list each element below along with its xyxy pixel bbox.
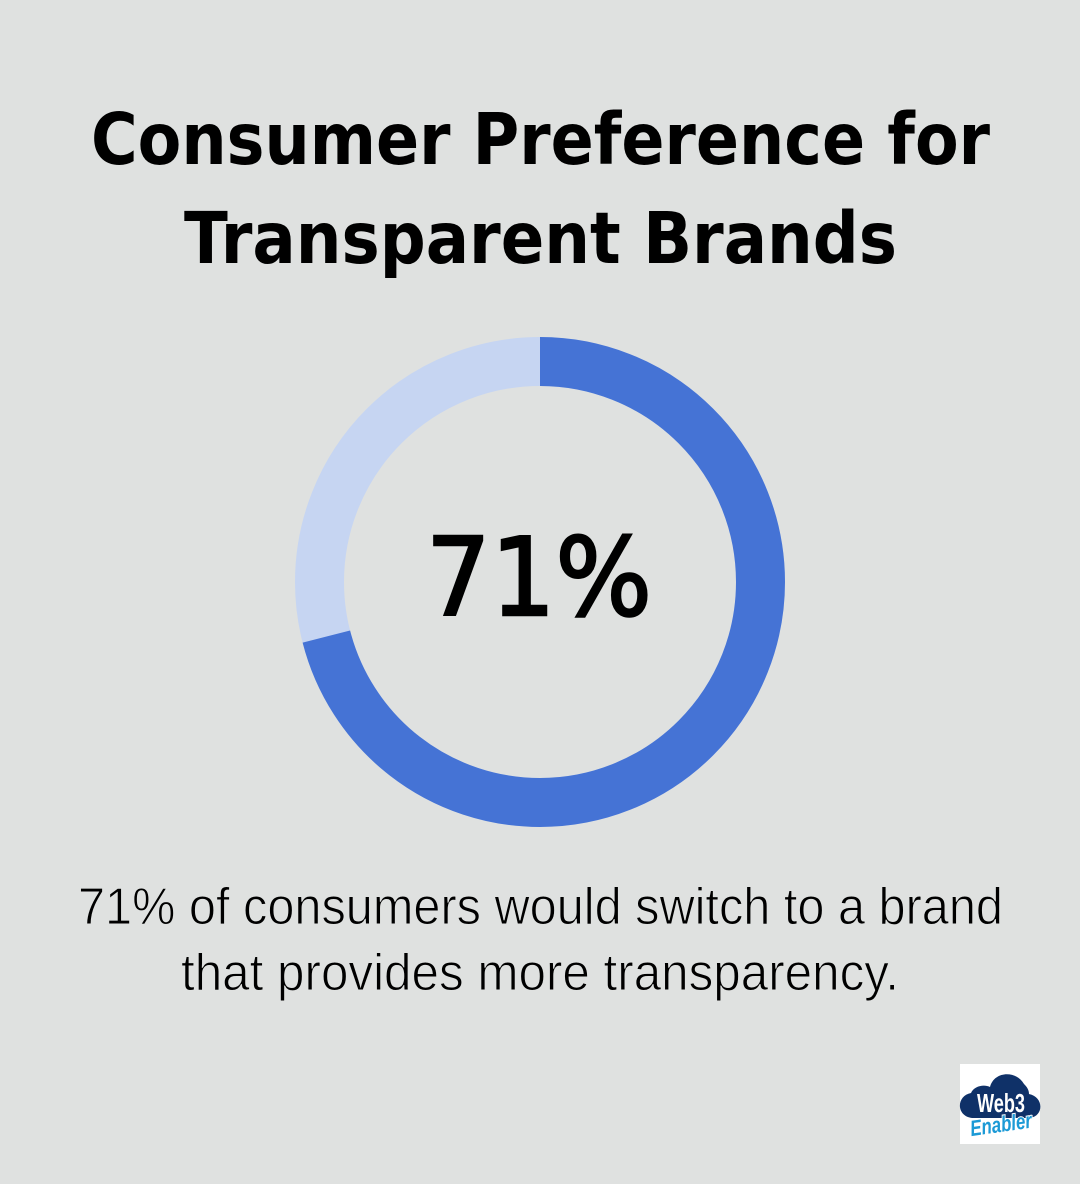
- title: Transparent Brands: [184, 197, 897, 280]
- description text: [78, 878, 1003, 1002]
- title: [91, 98, 990, 280]
- logo: Web3 Enabler: [960, 1064, 1040, 1144]
- icon: cloud: [960, 1074, 1040, 1118]
- donut center value: 71%: [426, 516, 652, 641]
- logo wordmark: Enabler: Enabler: [968, 1108, 1034, 1141]
- description text: 71% of consumers would switch to a brand: [78, 878, 1003, 936]
- donut chart: 71 percent: [320, 362, 760, 802]
- logo wordmark: Web3: Web3: [977, 1088, 1025, 1118]
- title: Consumer Preference for: [91, 98, 990, 181]
- description text: that provides more transparency.: [181, 944, 899, 1002]
